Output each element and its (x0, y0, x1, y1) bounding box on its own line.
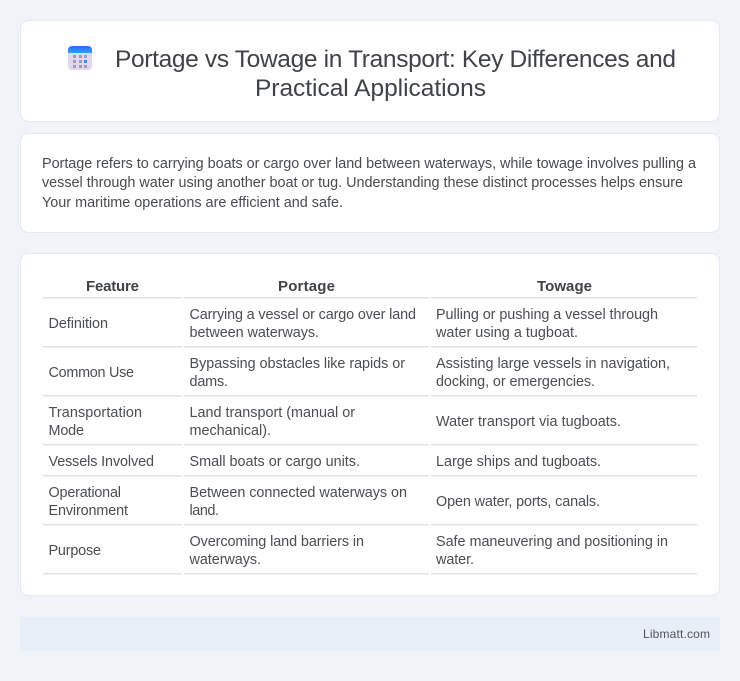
row: operational environment: Environment (48, 503, 128, 519)
row: transportation mode: Transportation (48, 405, 142, 421)
row: transportation mode (48, 405, 621, 439)
intro text: Portage refers to carrying boats or cargo over land between waterways, while towage involves pulling a (42, 156, 696, 172)
row: vessels involved: Large ships and tugboats. (436, 454, 601, 470)
row: definition (48, 307, 658, 341)
row: common use: dams. (190, 374, 228, 390)
row: vessels involved: Vessels Involved (48, 454, 154, 470)
row: transportation mode: Mode (48, 423, 84, 439)
intro text: vessel through water using another boat or tug. Understanding these distinct processes helps ensure (42, 175, 683, 191)
row: definition: water using a tugboat. (435, 325, 578, 341)
title (115, 46, 676, 102)
row: purpose: water. (435, 552, 474, 568)
intro text: Your maritime operations are efficient and safe. (42, 195, 343, 211)
footer text: Libmatt.com (643, 627, 710, 641)
row: definition: Carrying a vessel or cargo over land (190, 307, 416, 323)
icon: calendar (68, 46, 92, 70)
row: operational environment: Operational (48, 485, 121, 501)
row: purpose: Overcoming land barriers in (190, 534, 364, 550)
table header row: Feature (86, 278, 139, 295)
row: definition: Pulling or pushing a vessel through (436, 307, 658, 323)
header card (20, 20, 720, 122)
row: purpose: Purpose (48, 543, 101, 559)
title: Portage vs Towage in Transport: Key Differences and (115, 46, 676, 73)
row: operational environment: Open water, ports, canals. (436, 494, 600, 510)
table header row: Towage (537, 278, 592, 295)
row: operational environment: land. (190, 503, 219, 519)
row: transportation mode: Land transport (manual or (190, 405, 355, 421)
row: definition: between waterways. (190, 325, 319, 341)
row: common use: Common Use (48, 365, 134, 381)
row: vessels involved: Small boats or cargo units. (190, 454, 360, 470)
row: common use: Assisting large vessels in navigation, (436, 356, 670, 372)
row: operational environment (48, 485, 600, 519)
row: common use (48, 356, 670, 390)
row: transportation mode: mechanical). (190, 423, 271, 439)
row: purpose: waterways. (188, 552, 261, 568)
row: common use: Bypassing obstacles like rapids or (190, 356, 405, 372)
row: purpose (48, 534, 668, 568)
row: transportation mode: Water transport via tugboats. (436, 414, 621, 430)
row: definition: Definition (48, 316, 108, 332)
title: Practical Applications (255, 75, 486, 102)
footer bar (20, 617, 720, 651)
table header row: Portage (278, 278, 335, 295)
table header row (86, 278, 592, 295)
row: operational environment: Between connected waterways on (190, 485, 407, 501)
comparison table card (20, 254, 720, 596)
row: common use: docking, or emergencies. (436, 374, 595, 390)
row: vessels involved (48, 454, 601, 470)
intro text (42, 156, 696, 211)
intro card (20, 134, 720, 232)
row: purpose: Safe maneuvering and positioning in (436, 534, 668, 550)
